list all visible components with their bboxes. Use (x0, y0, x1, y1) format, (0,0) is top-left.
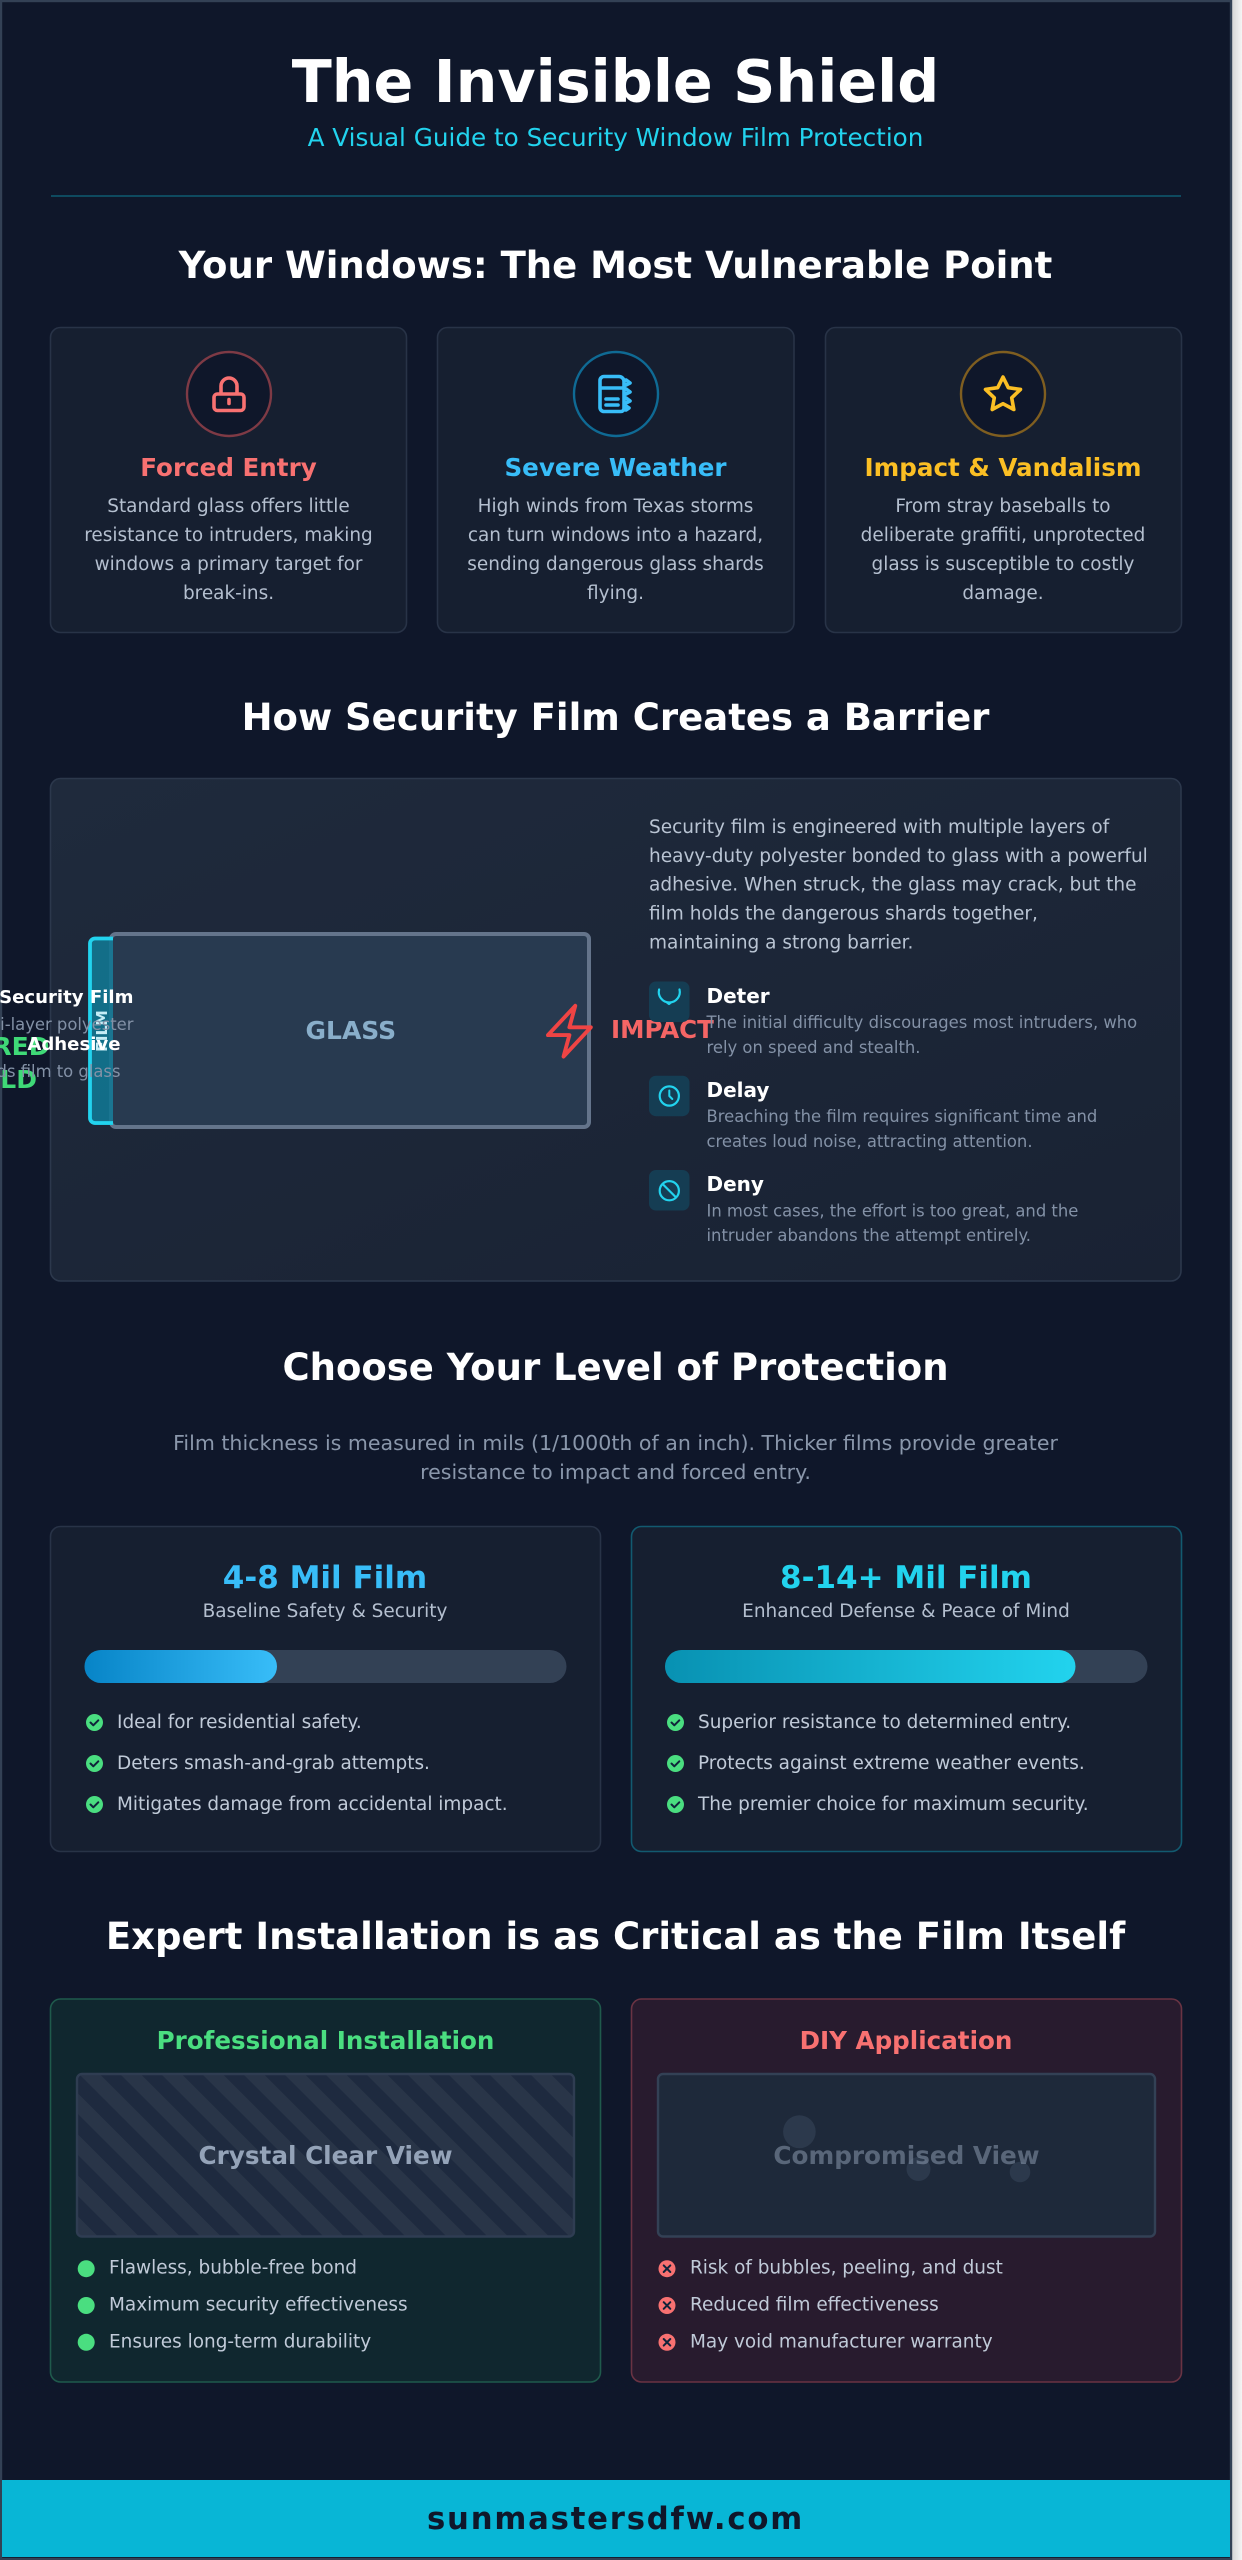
heading: level of protection: Choose Your Level of Protection (282, 1346, 949, 1389)
text: film explanation: Security film is engineered with multiple layers of (649, 817, 1110, 838)
card title: DIY Application (800, 2026, 1012, 2055)
card title: Professional Installation (157, 2026, 494, 2055)
item: deter: The initial difficulty discourages most intruders, who (706, 1013, 1137, 1032)
benefit list: Protects against extreme weather events. (698, 1753, 1085, 1774)
card text (467, 496, 764, 604)
header (292, 48, 939, 152)
item: delay: Delay (706, 1078, 769, 1102)
heading: barrier: How Security Film Creates a Barrier (242, 696, 990, 739)
benefit list: Mitigates damage from accidental impact. (117, 1794, 508, 1815)
text: film explanation: maintaining a strong barrier. (649, 932, 913, 954)
benefit list: Ideal for residential safety. (117, 1712, 362, 1733)
item: deny (649, 1170, 1078, 1245)
heading: vulnerable point: Your Windows: The Most Vulnerable Point (178, 244, 1052, 287)
icon: prohibited (649, 1170, 690, 1210)
text: film explanation: film holds the dangerous shards together, (649, 904, 1038, 924)
card text: glass is susceptible to costly (872, 554, 1135, 575)
benefit list (78, 2258, 408, 2352)
text: film explanation: adhesive. When struck, the glass may crack, but the (649, 874, 1136, 896)
benefit list: Superior resistance to determined entry. (698, 1712, 1071, 1733)
risk list: Risk of bubbles, peeling, and dust (690, 2258, 1003, 2278)
risk list: Reduced film effectiveness (690, 2294, 939, 2316)
card subtitle: Enhanced Defense & Peace of Mind (742, 1601, 1070, 1622)
card text: flying. (587, 583, 644, 604)
glass pane (111, 934, 589, 1127)
card text: Standard glass offers little (107, 496, 350, 517)
item: deter: rely on speed and stealth. (706, 1038, 920, 1057)
card text: deliberate graffiti, unprotected (861, 525, 1145, 546)
security film strip (90, 937, 113, 1125)
website: sunmastersdfw.com (427, 2502, 804, 2537)
benefit list: Maximum security effectiveness (109, 2294, 408, 2316)
panel: 4-8 mil film (50, 1526, 600, 1852)
text: film explanation (649, 817, 1148, 954)
panel: forced entry (50, 328, 406, 632)
callout: security film: Security Film (0, 987, 134, 1008)
film label: FILM (93, 1010, 111, 1052)
card text: windows a primary target for (95, 554, 363, 575)
benefit list (86, 1712, 508, 1815)
green label (0, 1037, 48, 1088)
panel: severe weather (438, 328, 794, 632)
icon: weather document (574, 352, 658, 436)
callout: adhesive (0, 1034, 120, 1081)
item: deter: Deter (706, 984, 770, 1008)
callout: adhesive: Adhesive (27, 1034, 120, 1055)
card title: Severe Weather (504, 453, 727, 482)
intro text: resistance to impact and forced entry. (420, 1460, 811, 1484)
panel: how film works (50, 778, 1181, 1281)
item: deny: intruder abandons the attempt entirely. (706, 1226, 1031, 1245)
icon: star (961, 352, 1045, 436)
item: delay: creates loud noise, attracting attention. (706, 1132, 1033, 1151)
intro text (173, 1431, 1058, 1484)
card text: High winds from Texas storms (478, 496, 753, 517)
card text: From stray baseballs to (895, 496, 1111, 517)
card text: damage. (962, 583, 1044, 604)
benefit list: Deters smash-and-grab attempts. (117, 1753, 430, 1774)
item: deter (649, 982, 1137, 1057)
card title: Forced Entry (140, 453, 317, 482)
footer (2, 2480, 1230, 2557)
title: The Invisible Shield (292, 48, 939, 116)
icon: lock (187, 352, 271, 436)
card text: sending dangerous glass shards (467, 554, 764, 575)
intro text: Film thickness is measured in mils (1/1000th of an inch). Thicker films provide greater (173, 1431, 1058, 1455)
benefit list (667, 1712, 1089, 1815)
protection bar (665, 1650, 1148, 1683)
card title: 8-14+ Mil Film (780, 1560, 1032, 1596)
benefit list: Ensures long-term durability (109, 2332, 371, 2352)
panel: 8-14+ mil film (632, 1526, 1182, 1852)
icon: impact bolt (548, 1006, 591, 1057)
panel: diy application (632, 1999, 1182, 2382)
benefit list: The premier choice for maximum security. (697, 1794, 1089, 1815)
card text (861, 496, 1145, 604)
visual: compromised view: Compromised View (773, 2141, 1040, 2170)
panel: professional installation (50, 1999, 600, 2382)
item: delay (649, 1076, 1097, 1151)
card title: Impact & Vandalism (864, 453, 1142, 482)
icon: clock (649, 1076, 690, 1116)
visual: clear view (77, 2074, 574, 2236)
card text: break-ins. (183, 583, 274, 604)
protection bar (84, 1650, 566, 1683)
card text (84, 496, 373, 604)
impact label: IMPACT (611, 1015, 714, 1044)
icon: deter (649, 982, 690, 1022)
card text: can turn windows into a hazard, (468, 525, 763, 546)
item: delay: Breaching the film requires significant time and (706, 1107, 1097, 1126)
text: film explanation: heavy-duty polyester bonded to glass with a powerful (649, 846, 1148, 867)
visual: clear view: Crystal Clear View (198, 2141, 453, 2170)
heading: expert installation: Expert Installation is as Critical as the Film Itself (106, 1915, 1126, 1958)
visual: compromised view (658, 2074, 1155, 2236)
item: deny: In most cases, the effort is too great, and the (706, 1202, 1078, 1220)
diagram: film and glass layers (0, 934, 714, 1127)
risk list: May void manufacturer warranty (690, 2332, 993, 2352)
card title: 4-8 Mil Film (223, 1560, 427, 1596)
card text: resistance to intruders, making (84, 525, 373, 546)
glass label: GLASS (306, 1016, 396, 1045)
item: deny: Deny (706, 1172, 764, 1196)
benefit list: Flawless, bubble-free bond (109, 2258, 357, 2278)
subtitle: A Visual Guide to Security Window Film Protection (308, 123, 923, 152)
callout: security film (0, 987, 134, 1034)
risk list (658, 2258, 1003, 2352)
panel: impact and vandalism (826, 328, 1182, 632)
card subtitle: Baseline Safety & Security (203, 1601, 447, 1622)
